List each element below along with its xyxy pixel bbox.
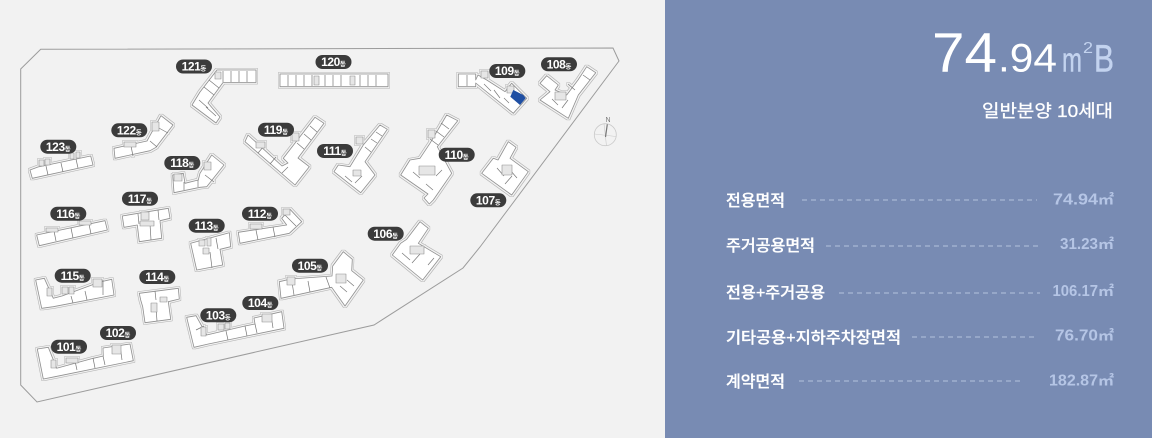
label 111: 111동 <box>323 144 347 158</box>
label 101 <box>51 340 87 354</box>
label 112 <box>242 207 278 221</box>
row: contract area: 182.87 <box>1049 372 1098 390</box>
label 117: 117동 <box>128 192 152 206</box>
label 105: 105동 <box>298 259 322 273</box>
buildings 103 and 104 <box>187 312 284 347</box>
label 107 <box>470 193 506 208</box>
label 117 <box>122 192 158 206</box>
building 113 <box>191 233 231 270</box>
row: exclusive area: ㎡ <box>1098 192 1114 208</box>
building 122 <box>114 116 173 158</box>
label 102: 102동 <box>106 326 130 340</box>
building 109 <box>458 71 527 113</box>
highlighted unit <box>510 90 526 105</box>
label 113 <box>189 219 225 233</box>
row: contract area <box>726 372 1114 391</box>
building 121 <box>192 70 256 123</box>
building 110 <box>401 115 458 204</box>
row: exclusive plus residential common: ㎡ <box>1098 283 1114 299</box>
label 111 <box>317 144 353 158</box>
building 123 <box>30 152 93 178</box>
row: other common and parking: ㎡ <box>1098 328 1114 344</box>
building 117 <box>122 208 170 242</box>
label 120 <box>316 55 352 69</box>
label 118: 118동 <box>170 156 194 170</box>
heading: unit size: 74 <box>932 20 997 84</box>
site boundary <box>21 48 619 402</box>
row: exclusive area <box>726 192 1114 210</box>
label 119 <box>258 123 294 137</box>
label 113: 113동 <box>195 219 219 233</box>
label 101: 101동 <box>57 340 81 354</box>
row: residential common area: 주거공용면적 <box>726 237 815 255</box>
building 107 <box>482 142 528 195</box>
row: exclusive plus residential common: 전용+주거공용 <box>726 284 825 302</box>
building 119 <box>245 117 324 185</box>
row: other common and parking: 76.70 <box>1055 328 1098 344</box>
label 109: 109동 <box>495 64 520 78</box>
row: exclusive plus residential common <box>726 283 1114 302</box>
building 108 <box>540 67 596 118</box>
panel: site plan <box>0 0 665 438</box>
label 110: 110동 <box>445 148 469 162</box>
label 108 <box>541 57 577 72</box>
heading: unit size: m <box>1062 42 1082 80</box>
label 116: 116동 <box>56 207 80 221</box>
heading: unit size <box>932 20 1114 84</box>
compass: N <box>605 117 611 124</box>
row: exclusive area: 74.94 <box>1053 192 1098 208</box>
label 118 <box>164 156 200 170</box>
label 121: 121동 <box>182 60 206 74</box>
label 104 <box>242 296 278 310</box>
label 102 <box>100 326 136 340</box>
label 122 <box>111 123 147 138</box>
building 116 <box>37 221 107 246</box>
label 120: 120동 <box>321 55 346 69</box>
label 123: 123동 <box>46 140 71 154</box>
label 115: 115동 <box>61 269 85 283</box>
label 123 <box>40 140 76 154</box>
label 114 <box>139 270 175 284</box>
row: exclusive area: 전용면적 <box>726 192 785 210</box>
label 103 <box>200 308 236 322</box>
building 115 <box>36 278 114 308</box>
building 112 <box>238 209 302 243</box>
row: contract area: 계약면적 <box>726 373 785 391</box>
label 106 <box>368 227 404 241</box>
subheading: 일반분양 10세대 <box>982 101 1113 121</box>
heading: unit size: 2 <box>1083 40 1093 57</box>
label 122: 122동 <box>117 124 142 138</box>
label 116 <box>50 207 86 221</box>
building 114 <box>139 288 179 323</box>
label 108: 108동 <box>547 58 571 72</box>
row: residential common area: 31.23 <box>1060 236 1098 253</box>
label 119: 119동 <box>264 123 288 137</box>
row: contract area: ㎡ <box>1098 372 1114 388</box>
label 114: 114동 <box>145 270 169 284</box>
compass <box>594 117 616 146</box>
heading: unit size: B <box>1094 38 1114 80</box>
row: other common and parking: 기타공용+지하주차장면적 <box>726 329 901 347</box>
panel: unit details <box>665 0 1152 438</box>
label 115 <box>55 269 91 283</box>
label 109 <box>489 64 525 78</box>
row: other common and parking <box>726 328 1114 347</box>
building 105 <box>279 252 363 306</box>
building 111 <box>334 125 387 193</box>
label 112: 112동 <box>248 207 272 221</box>
row: residential common area: ㎡ <box>1098 236 1114 252</box>
label 104: 104동 <box>248 296 273 310</box>
label 105 <box>292 259 328 273</box>
label 107: 107동 <box>476 194 501 208</box>
row: exclusive plus residential common: 106.17 <box>1052 283 1098 300</box>
heading: unit size: .94 <box>998 36 1057 80</box>
building 120 <box>280 74 388 87</box>
building 106 <box>392 222 441 280</box>
row: residential common area <box>726 236 1114 255</box>
label 106: 106동 <box>373 227 398 241</box>
label 121 <box>176 60 212 74</box>
label 110 <box>439 148 475 162</box>
label 103: 103동 <box>206 308 231 322</box>
building 118 <box>173 155 224 193</box>
buildings 101 and 102 <box>37 344 133 379</box>
